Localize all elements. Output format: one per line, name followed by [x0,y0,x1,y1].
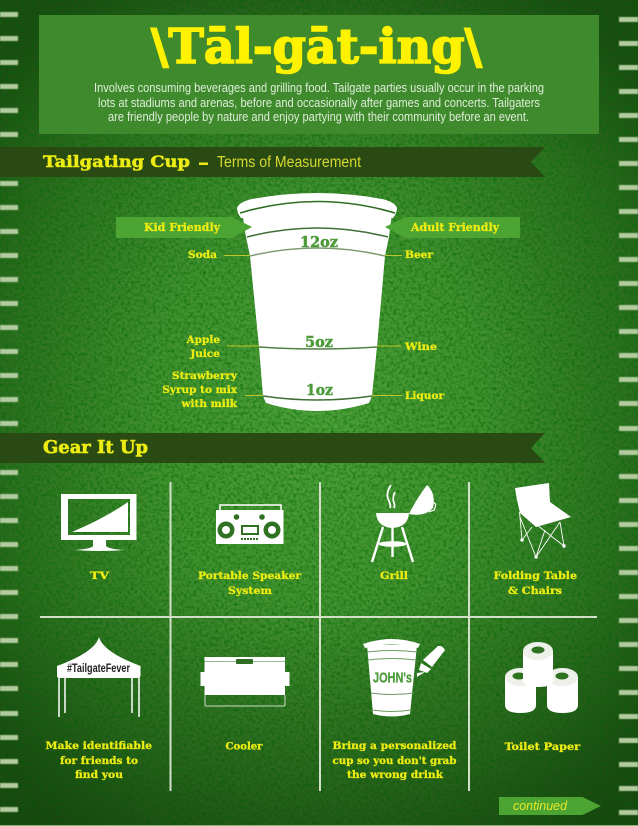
label: Toilet Paper: Toilet Paper [504,741,580,753]
kid drink labels [162,249,238,410]
adult drink labels [404,249,444,402]
kid drink labels: Soda [188,249,217,261]
adult drink labels: Beer [405,249,433,261]
label: tent: find you [75,769,123,781]
yard markers: right [619,17,638,815]
kid drink labels: Strawberry [172,370,238,382]
label: Folding Table and Chairs: & Chairs [508,585,562,597]
label: personalized cup: cup so you don't grab [332,755,456,767]
arrow: Kid Friendly [116,217,252,238]
gear: personalized cup [332,639,457,781]
arrow: continued [499,797,601,815]
gear: Toilet Paper [504,642,580,753]
icon: folding chair [515,483,571,559]
label: tent: for friends to [60,755,138,767]
label: Portable Speaker System: Portable Speaker [198,570,301,582]
arrow: Kid Friendly: Kid Friendly [144,221,221,234]
kid drink labels: Apple [186,334,220,346]
gear: Folding Table and Chairs [494,483,577,597]
label: Folding Table and Chairs: Folding Table [494,570,577,582]
label: personalized cup: the wrong drink [347,769,444,781]
label: TV: TV [90,570,110,582]
icon: grill [372,485,436,562]
kid drink labels: Syrup to mix [162,384,238,396]
icon: tent [57,637,140,717]
banner heading: Tailgating Cup [43,152,190,171]
arrow: Adult Friendly: Adult Friendly [410,221,500,234]
definition text: are friendly people by nature and enjoy partying with their community before an event. [108,110,529,124]
icon: cup and marker [363,639,445,716]
12oz label: 12oz [300,233,338,251]
1oz label: 1oz [306,381,333,399]
panel: definition header [39,15,599,134]
label: Portable Speaker System: System [228,585,272,597]
gear: tent [46,637,152,781]
definition text: Involves consuming beverages and grilling food. Tailgate parties usually occur in the parking [94,81,544,95]
gear: Portable Speaker System [198,505,301,597]
banner subheading: Terms of Measurement [217,154,362,171]
arrow: continued: continued [513,798,568,813]
arrow: Adult Friendly [385,217,520,238]
banner: Gear It Up [0,433,545,463]
adult drink labels: Liquor [405,390,444,402]
gear: Grill [372,485,436,582]
icon: toilet paper rolls [505,642,578,713]
label: Grill: Grill [380,570,408,582]
kid drink labels: Juice [189,348,220,360]
cup body [241,205,393,411]
yard markers: left [0,12,18,812]
icon: cooler [200,657,290,706]
banner: Tailgating Cup [0,147,545,177]
5oz label: 5oz [305,333,333,351]
gear: TV [61,494,136,582]
label: Folding Table and Chairs [494,570,577,597]
icon: boombox [216,505,284,544]
adult drink labels: Wine [404,341,437,353]
banner dash [199,162,208,165]
label: tent [46,740,152,781]
gear: Cooler [200,657,290,752]
label: personalized cup: Bring a personalized [332,740,457,752]
label: Cooler: Cooler [226,740,263,752]
gear grid lines [40,482,597,791]
cup measure lines [240,202,395,400]
icon: cup and marker: JOHN's [373,670,412,686]
banner heading: Gear It Up [43,437,148,458]
label: tent: Make identifiable [46,740,152,752]
definition text: lots at stadiums and arenas, before and occasionally after games and concerts. Tailgaters [98,96,540,110]
cup rim [237,193,397,218]
label: personalized cup [332,740,457,781]
label: Portable Speaker System [198,570,301,597]
icon: tent: #TailgateFever [67,663,130,675]
kid drink labels: with milk [180,398,238,410]
definition text [94,81,544,124]
leader lines [224,256,402,396]
cup diagram [116,193,520,411]
title: \Tāl-gāt-ing\ [151,19,482,75]
icon: TV [61,494,136,551]
